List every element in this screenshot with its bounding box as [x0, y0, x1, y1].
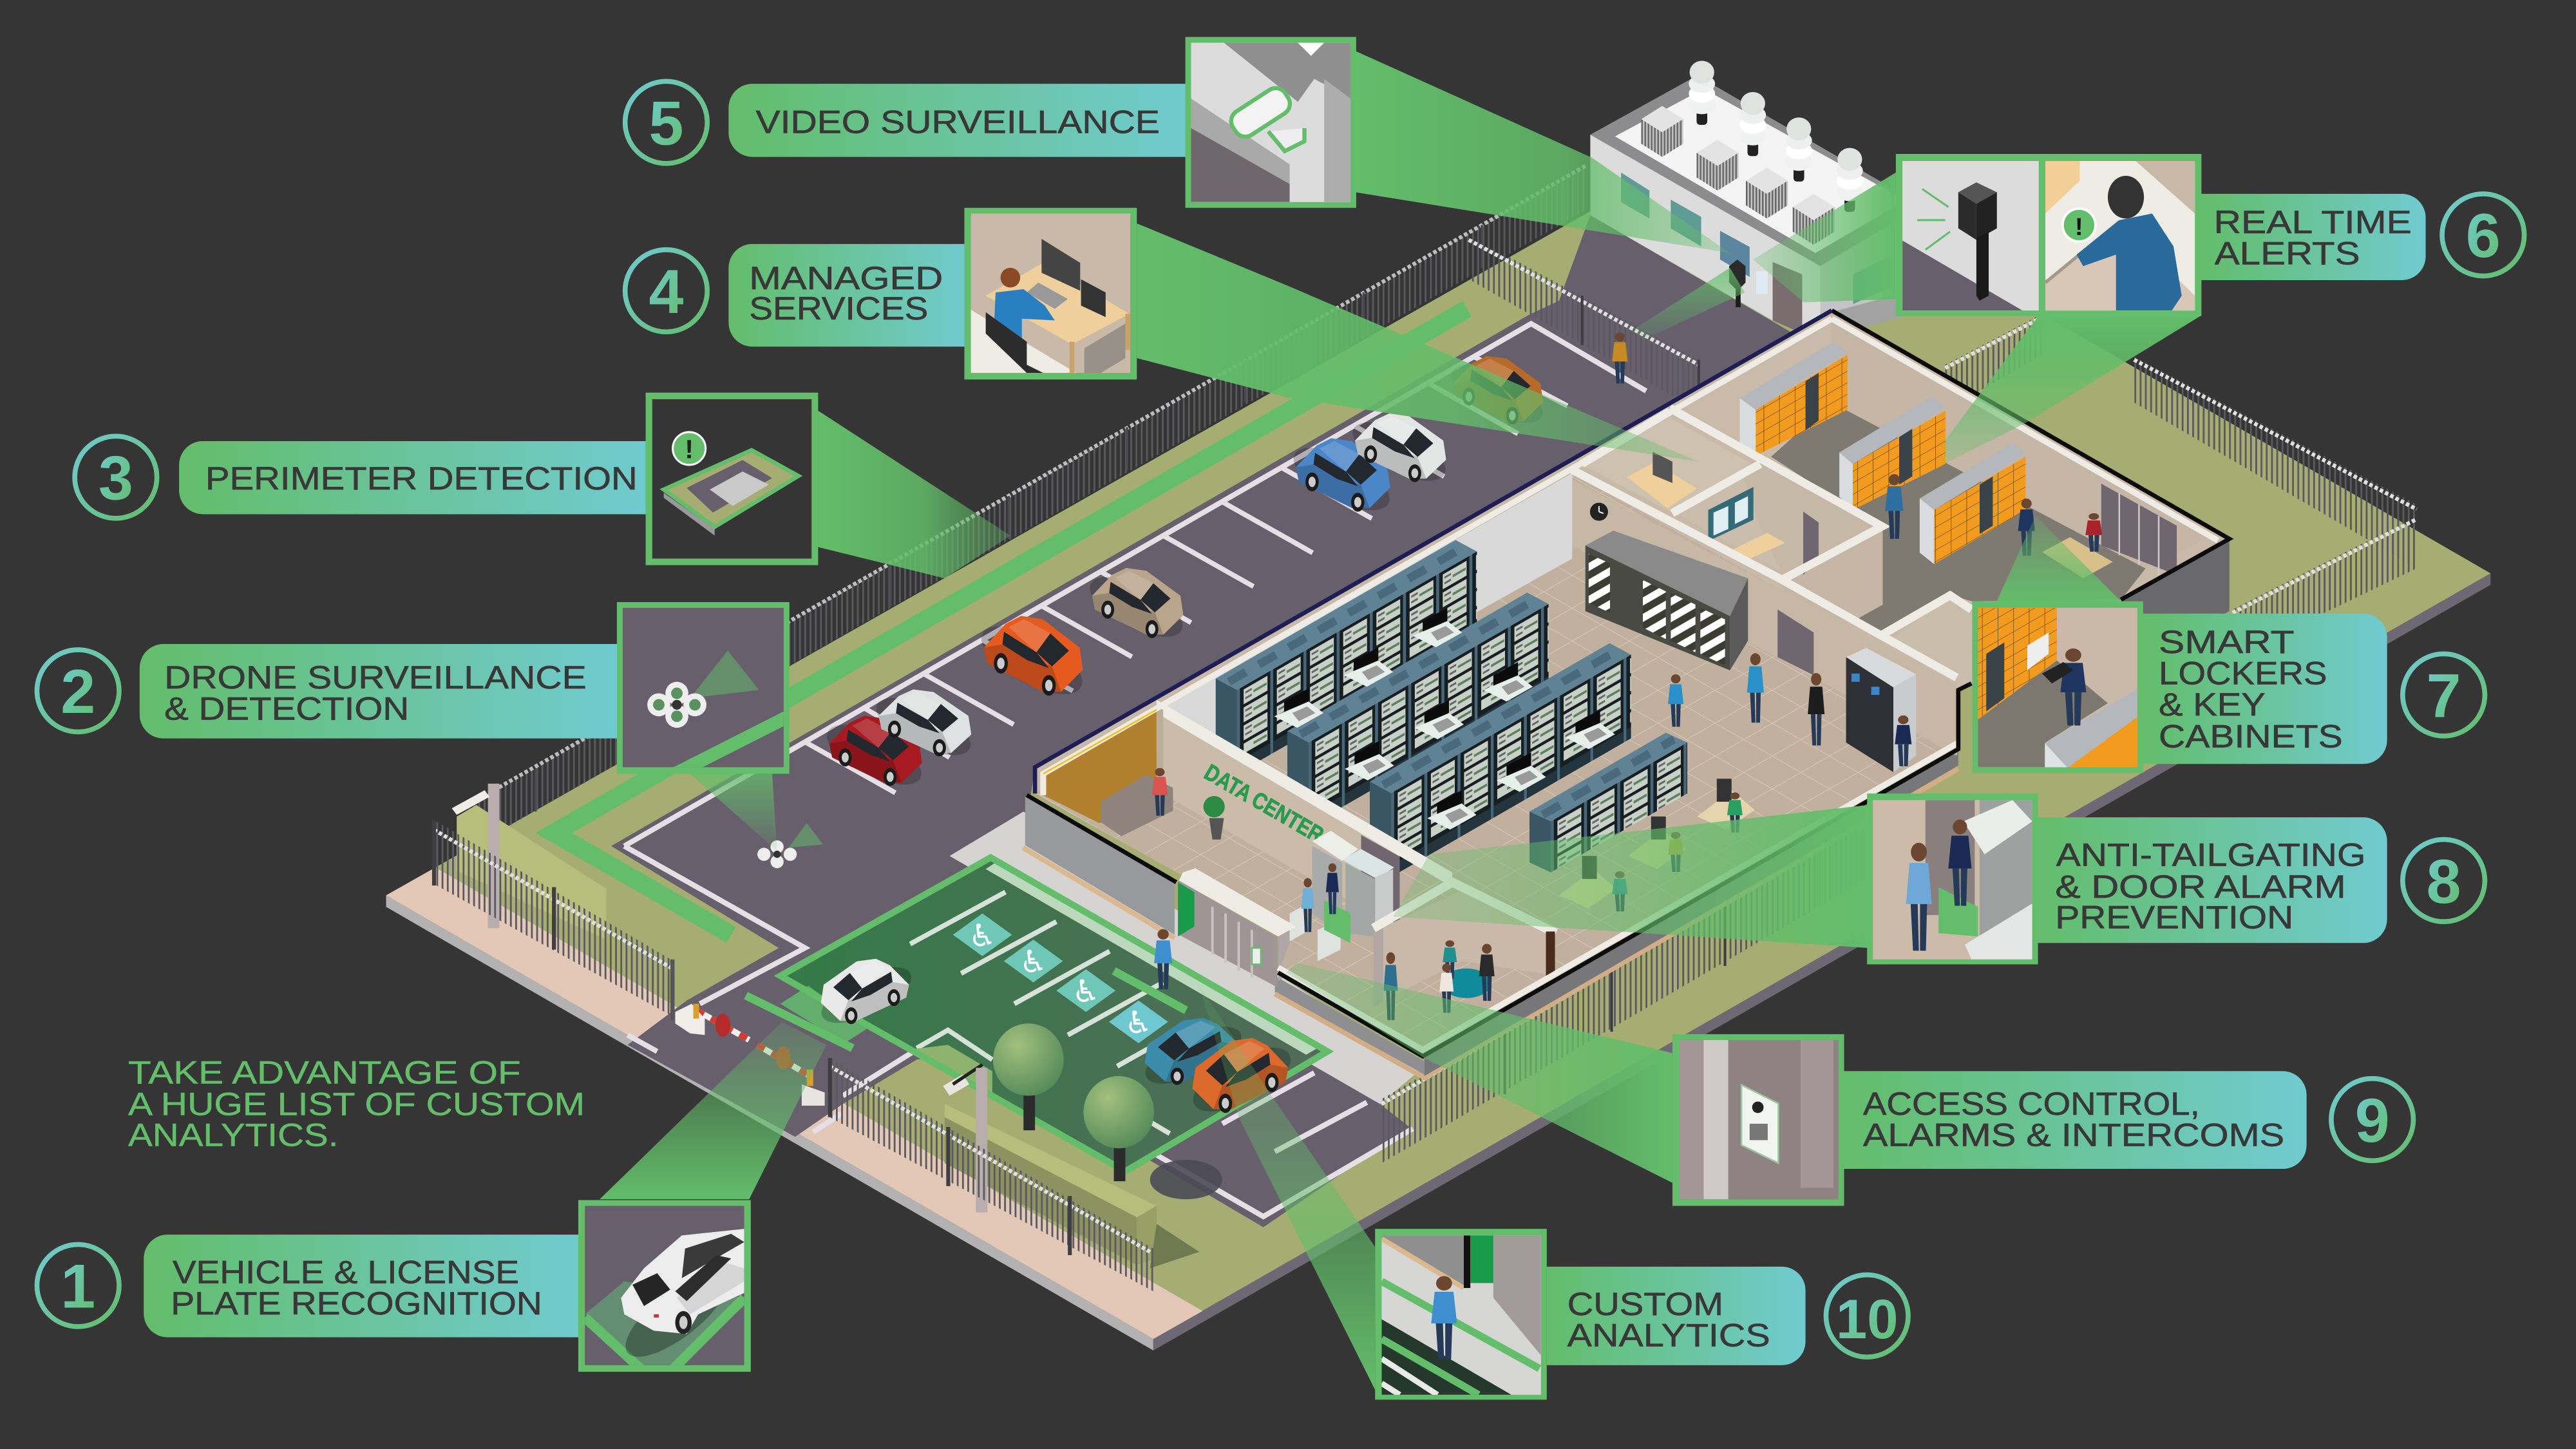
beam: sensor to guard — [1634, 268, 1745, 340]
number badge — [2331, 1079, 2413, 1160]
label pill — [728, 244, 969, 346]
access road and parking area — [611, 215, 1832, 1227]
label text: & DOOR ALARM — [2055, 869, 2346, 905]
lobby feature wall — [1043, 710, 1157, 823]
antennas — [1689, 61, 1863, 212]
label pill — [140, 644, 621, 739]
thumbnail: walking person — [1375, 1229, 1547, 1399]
label text: ALERTS — [2215, 236, 2360, 272]
lot outline — [781, 858, 1327, 1171]
callout 5: video surveillance — [625, 37, 1356, 208]
interior wall tops — [1572, 408, 1971, 677]
outer wall caps — [1027, 310, 2230, 1056]
label text: ANALYTICS — [1567, 1318, 1770, 1354]
alert badge — [2063, 209, 2096, 242]
label text: SMART — [2159, 624, 2295, 660]
hall rear wall — [1163, 473, 1572, 755]
network cabinets — [1586, 531, 1748, 670]
locker units — [1740, 343, 2025, 564]
data center building — [1023, 310, 2230, 1077]
thumbnail: intercom panel — [1672, 1034, 1844, 1206]
accessible stall markers: ♿ — [969, 918, 996, 954]
number badge — [37, 1244, 119, 1327]
right and gate fences — [1381, 235, 2417, 1163]
annex windows — [1621, 173, 1890, 304]
lower-left perimeter fence — [432, 820, 674, 1020]
thumbnail: site plan with alert — [646, 393, 818, 565]
lobby partition wall — [1157, 700, 1452, 930]
server rack rows — [1216, 540, 1687, 877]
lane highlight — [781, 986, 867, 1043]
entry signs — [1756, 271, 1768, 294]
security turnstiles — [1290, 831, 1399, 961]
label text: ALARMS & INTERCOMS — [1863, 1117, 2284, 1153]
wall clock — [1590, 503, 1608, 521]
conference table — [1442, 969, 1491, 998]
label text: VIDEO SURVEILLANCE — [755, 104, 1160, 140]
label pill — [2200, 194, 2426, 280]
label text — [1567, 1286, 1770, 1354]
callout 8: anti-tailgating — [1867, 793, 2485, 964]
number badge: 8 — [2427, 846, 2461, 916]
alert badge: ! — [2075, 213, 2083, 241]
label pill — [1843, 1071, 2307, 1169]
loading room doors — [2101, 484, 2177, 575]
label text: ANTI-TAILGATING — [2056, 837, 2365, 873]
label text: PERIMETER DETECTION — [205, 460, 638, 497]
number badge — [625, 250, 707, 332]
intro note: TAKE ADVANTAGE OF — [128, 1054, 521, 1090]
number badge: 9 — [2355, 1085, 2390, 1155]
number badge: 5 — [649, 88, 683, 158]
callout 4: managed services — [625, 208, 1137, 379]
upper-left perimeter fence — [468, 166, 1586, 849]
accessible stall markers: ♿ — [1124, 1005, 1153, 1041]
staff figures — [1152, 474, 2102, 1020]
number badge — [75, 436, 157, 518]
tan partitions — [1784, 529, 1882, 657]
lobby sofa — [1101, 775, 1173, 836]
rooftop AC units — [1641, 106, 1835, 245]
thumbnail: drone — [617, 602, 790, 781]
potted plant — [1204, 796, 1225, 840]
beam: smart lockers — [1996, 516, 2123, 603]
floor plate — [1035, 310, 2230, 1056]
label text: CABINETS — [2159, 719, 2343, 755]
alert badge: ! — [685, 435, 694, 464]
label text — [2214, 204, 2412, 272]
entrance doors — [1179, 880, 1278, 987]
label text: VEHICLE & LICENSE — [173, 1254, 519, 1290]
label text: PLATE RECOGNITION — [171, 1285, 542, 1321]
number badge: 4 — [649, 256, 683, 327]
label text: MANAGED — [749, 260, 943, 296]
callout 2: drone surveillance and detection — [37, 602, 790, 781]
label text: DRONE SURVEILLANCE — [164, 659, 587, 696]
intro note — [128, 1054, 585, 1153]
number badge: 10 — [1836, 1288, 1898, 1350]
building sidewalk — [949, 811, 1423, 1104]
parking stripes — [805, 357, 1567, 793]
label text: REAL TIME — [2214, 204, 2412, 240]
hall doors — [1777, 609, 1814, 675]
alert badge — [673, 432, 706, 465]
label text: & KEY — [2159, 687, 2266, 723]
label text — [2055, 837, 2365, 935]
accessible stall markers: ♿ — [1072, 974, 1100, 1010]
beam: drone — [690, 774, 777, 851]
thumbnail: security gate — [1867, 793, 2038, 964]
thumbnail: operator at desk — [964, 208, 1137, 379]
stalls — [910, 892, 1170, 1133]
label pill — [2143, 614, 2387, 764]
beam: video surveillance — [1356, 51, 1730, 253]
number badge: 6 — [2466, 200, 2501, 270]
accessible stall markers — [953, 913, 1168, 1043]
label text — [171, 1254, 542, 1321]
number badge — [37, 650, 119, 732]
upper room back walls — [1681, 320, 1832, 477]
rooftop annex building — [1590, 61, 1922, 334]
annex door — [1773, 262, 1802, 334]
callout 3: perimeter detection — [75, 393, 818, 565]
beam: anti-tailgating — [1393, 805, 1868, 948]
label text: CUSTOM — [1567, 1286, 1723, 1322]
thumbnail: white car — [578, 1200, 751, 1372]
beam: perimeter detection — [818, 411, 1010, 578]
server cabinets — [1846, 648, 1916, 772]
isometric site ground — [386, 211, 2490, 1350]
number badge — [1826, 1275, 1908, 1357]
number badge: 2 — [61, 656, 95, 726]
label pill — [728, 84, 1191, 157]
thumbnail: locker and courier — [1972, 601, 2143, 773]
parked cars — [813, 353, 1551, 1124]
beam: access control — [1286, 963, 1672, 1183]
label text: ACCESS CONTROL, — [1863, 1086, 2200, 1122]
label text — [164, 659, 587, 726]
rack workstations — [1274, 608, 1615, 829]
conference room walls — [1374, 882, 1556, 1007]
hall tile floor — [1035, 473, 1958, 1056]
label pill — [179, 441, 649, 514]
olive inset — [907, 1045, 992, 1097]
beam: real time alerts to annex — [1753, 173, 1896, 302]
callout 6: real time alerts — [1896, 154, 2524, 316]
intro note: A HUGE LIST OF CUSTOM — [128, 1086, 585, 1122]
label text — [749, 260, 943, 327]
beam: custom analytics — [1199, 986, 1375, 1390]
lower perimeter fence — [828, 1058, 1153, 1291]
lock desk — [2042, 537, 2113, 578]
callout 7: smart lockers and key cabinets — [1972, 601, 2485, 773]
callout 10: custom analytics — [1375, 1229, 1908, 1399]
label text — [1863, 1086, 2284, 1153]
beam: vehicle recognition — [600, 1022, 826, 1199]
label pill — [1547, 1267, 1806, 1365]
gate guard — [1612, 333, 1627, 383]
callout 1: vehicle and license plate recognition — [37, 1200, 751, 1372]
upper room floor — [1771, 402, 2146, 634]
lower hedge, sensor and pole — [943, 1065, 1199, 1268]
label text: LOCKERS — [2159, 655, 2327, 691]
lower-left hedge and pole — [452, 784, 606, 940]
drone over parking lot — [757, 823, 823, 868]
beam: managed services — [1137, 223, 1699, 462]
label text: PREVENTION — [2055, 899, 2293, 935]
perimeter detection band — [554, 309, 1467, 935]
wall sign: DATA CENTER — [1200, 759, 1328, 848]
thumbnail: sensor and responder — [1896, 154, 2201, 316]
callout 9: access control — [1672, 1034, 2413, 1206]
number badge — [2442, 194, 2524, 276]
number badge: 3 — [99, 443, 133, 513]
thumbnail: security camera — [1186, 37, 1356, 208]
intro note: ANALYTICS. — [128, 1117, 339, 1153]
trees — [993, 1023, 1222, 1199]
label pill — [144, 1235, 585, 1338]
office desks and video wall — [1559, 452, 1819, 909]
number badge — [625, 81, 707, 164]
number badge: 7 — [2427, 661, 2461, 731]
number badge — [2403, 654, 2485, 736]
label text: & DETECTION — [164, 690, 409, 726]
accessible stall markers: ♿ — [1019, 944, 1047, 980]
vehicle entry barrier gate — [675, 1004, 825, 1106]
exterior walls — [1025, 797, 1175, 935]
number badge: 1 — [61, 1251, 95, 1321]
beam: real time alerts to locker room — [1945, 316, 2201, 463]
security sensor post — [1729, 260, 1745, 307]
label pill — [2036, 817, 2387, 943]
number badge — [2403, 840, 2485, 922]
label text — [2159, 624, 2343, 755]
label text: SERVICES — [749, 290, 928, 327]
accessible parking lot — [746, 858, 1327, 1171]
